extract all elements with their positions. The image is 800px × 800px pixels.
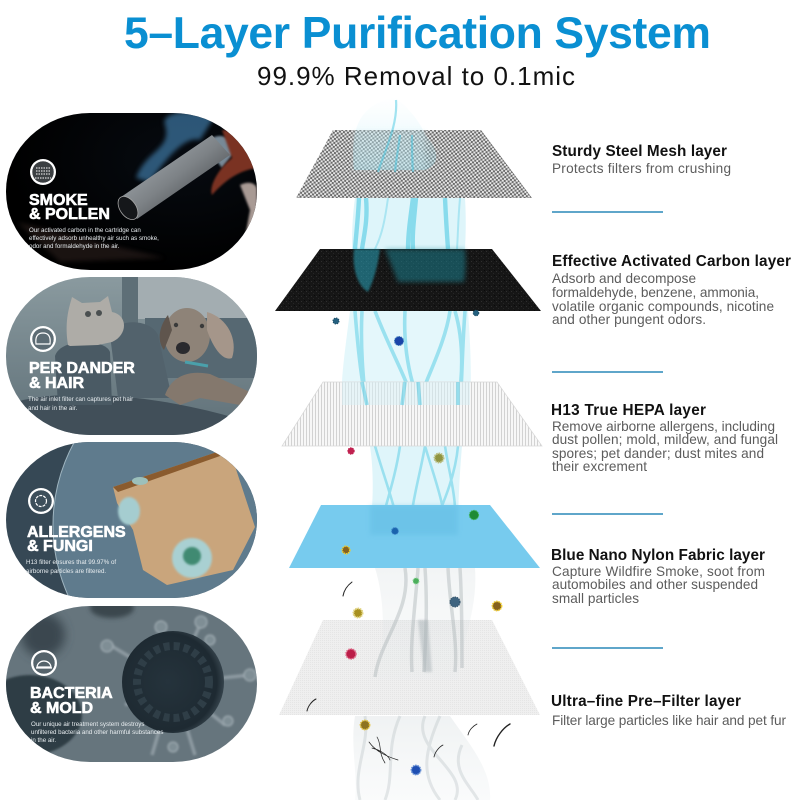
- text: smoke description: effectively adsorb unhealthy air such as smoke,: [29, 235, 159, 242]
- icon: pet: [30, 326, 56, 352]
- icon: smoke: [30, 159, 56, 185]
- text block: steel mesh: Sturdy Steel Mesh layer: [552, 143, 727, 160]
- text block: steel mesh: [552, 143, 731, 176]
- text: pet description: and hair in the air.: [28, 405, 77, 412]
- airflow between HEPA and blue nylon: [370, 446, 462, 535]
- title: 5–Layer Purification System: [124, 9, 711, 58]
- layer 5: ultra-fine pre-filter: [279, 620, 540, 715]
- panel: allergens and fungi: [6, 442, 257, 598]
- layer 1: sturdy steel mesh: [296, 130, 532, 198]
- text block: HEPA: their excrement: [552, 459, 647, 474]
- text block: activated carbon: [552, 253, 791, 327]
- layer 2: activated carbon: [275, 249, 541, 311]
- airflow on blue nylon: [370, 505, 458, 535]
- layer 3: H13 true HEPA: [282, 382, 542, 446]
- text: bacteria description: unfiltered bacteria and other harmful substances: [31, 729, 163, 736]
- heading: smoke and pollen: SMOKE: [29, 192, 88, 209]
- text block: nylon: Blue Nano Nylon Fabric layer: [551, 547, 765, 564]
- airflow below pre-filter: [353, 716, 490, 800]
- airflow over HEPA: [342, 382, 470, 405]
- icon: bacteria: [31, 650, 57, 676]
- panel: bacteria and mold: [0, 598, 257, 762]
- heading: pet dander and hair: PER DANDER: [29, 360, 135, 377]
- text block: nylon: small particles: [552, 591, 639, 606]
- text block: nylon: [551, 547, 765, 606]
- icon: allergen: [28, 488, 54, 514]
- heading: smoke and pollen: & POLLEN: [29, 206, 110, 223]
- text: smoke description: Our activated carbon in the cartridge can: [29, 227, 141, 234]
- text block: pre-filter: Ultra–fine Pre–Filter layer: [551, 693, 741, 710]
- heading: allergens and fungi: ALLERGENS: [27, 524, 126, 541]
- text block: activated carbon: volatile organic compounds, nicotine: [552, 299, 774, 314]
- text: bacteria description: in the air.: [31, 737, 56, 744]
- airflow on carbon: [354, 249, 466, 292]
- heading: allergens and fungi: & FUNGI: [27, 538, 93, 555]
- airflow between blue nylon and pre-filter: [375, 568, 475, 680]
- text block: HEPA: Remove airborne allergens, including: [552, 419, 775, 434]
- text block: nylon: Capture Wildfire Smoke, soot from: [552, 564, 765, 579]
- particles: [333, 310, 502, 775]
- text block: activated carbon: Adsorb and decompose: [552, 271, 696, 286]
- text block: pre-filter: Filter large particles like hair and pet fur: [552, 713, 786, 728]
- text block: HEPA: spores; pet dander; dust mites and: [552, 446, 764, 461]
- text block: activated carbon: and other pungent odors.: [552, 312, 706, 327]
- text block: steel mesh: Protects filters from crushing: [552, 161, 731, 176]
- text block: pre-filter: [551, 693, 786, 728]
- text block: HEPA: [551, 402, 778, 474]
- airflow between mesh and carbon: [352, 198, 466, 249]
- text block: activated carbon: formaldehyde, benzene, ammonia,: [552, 285, 759, 300]
- text block: nylon: automobiles and other suspended: [552, 577, 758, 592]
- text: allergens description: H13 filter ensures that 99.97% of: [26, 559, 116, 566]
- text: allergens description: airborne particles are filtered.: [26, 568, 106, 575]
- layer 4: blue nano nylon: [289, 505, 540, 568]
- subtitle: 99.9% Removal to 0.1mic: [257, 61, 575, 91]
- text: pet description: The air inlet filter can captures pet hair: [28, 396, 133, 403]
- panel: pet dander and hair: [6, 277, 257, 435]
- text block: activated carbon: Effective Activated Carbon layer: [552, 253, 791, 270]
- chart: filter layer stack with airflow: [275, 97, 542, 800]
- hairs: [307, 582, 510, 763]
- heading: bacteria and mold: BACTERIA: [30, 685, 113, 702]
- heading: bacteria and mold: & MOLD: [30, 700, 93, 717]
- text: smoke description: odor and formaldehyde in the air.: [29, 243, 120, 250]
- airflow between carbon and HEPA: [342, 311, 471, 405]
- text block: HEPA: dust pollen; mold, mildew, and fungal: [552, 432, 778, 447]
- heading: pet dander and hair: & HAIR: [29, 375, 85, 392]
- airflow above and over mesh: [353, 97, 436, 172]
- text: bacteria description: Our unique air treatment system destroys: [31, 721, 144, 728]
- text block: HEPA: H13 True HEPA layer: [551, 402, 706, 419]
- panel: smoke and pollen: [6, 112, 257, 270]
